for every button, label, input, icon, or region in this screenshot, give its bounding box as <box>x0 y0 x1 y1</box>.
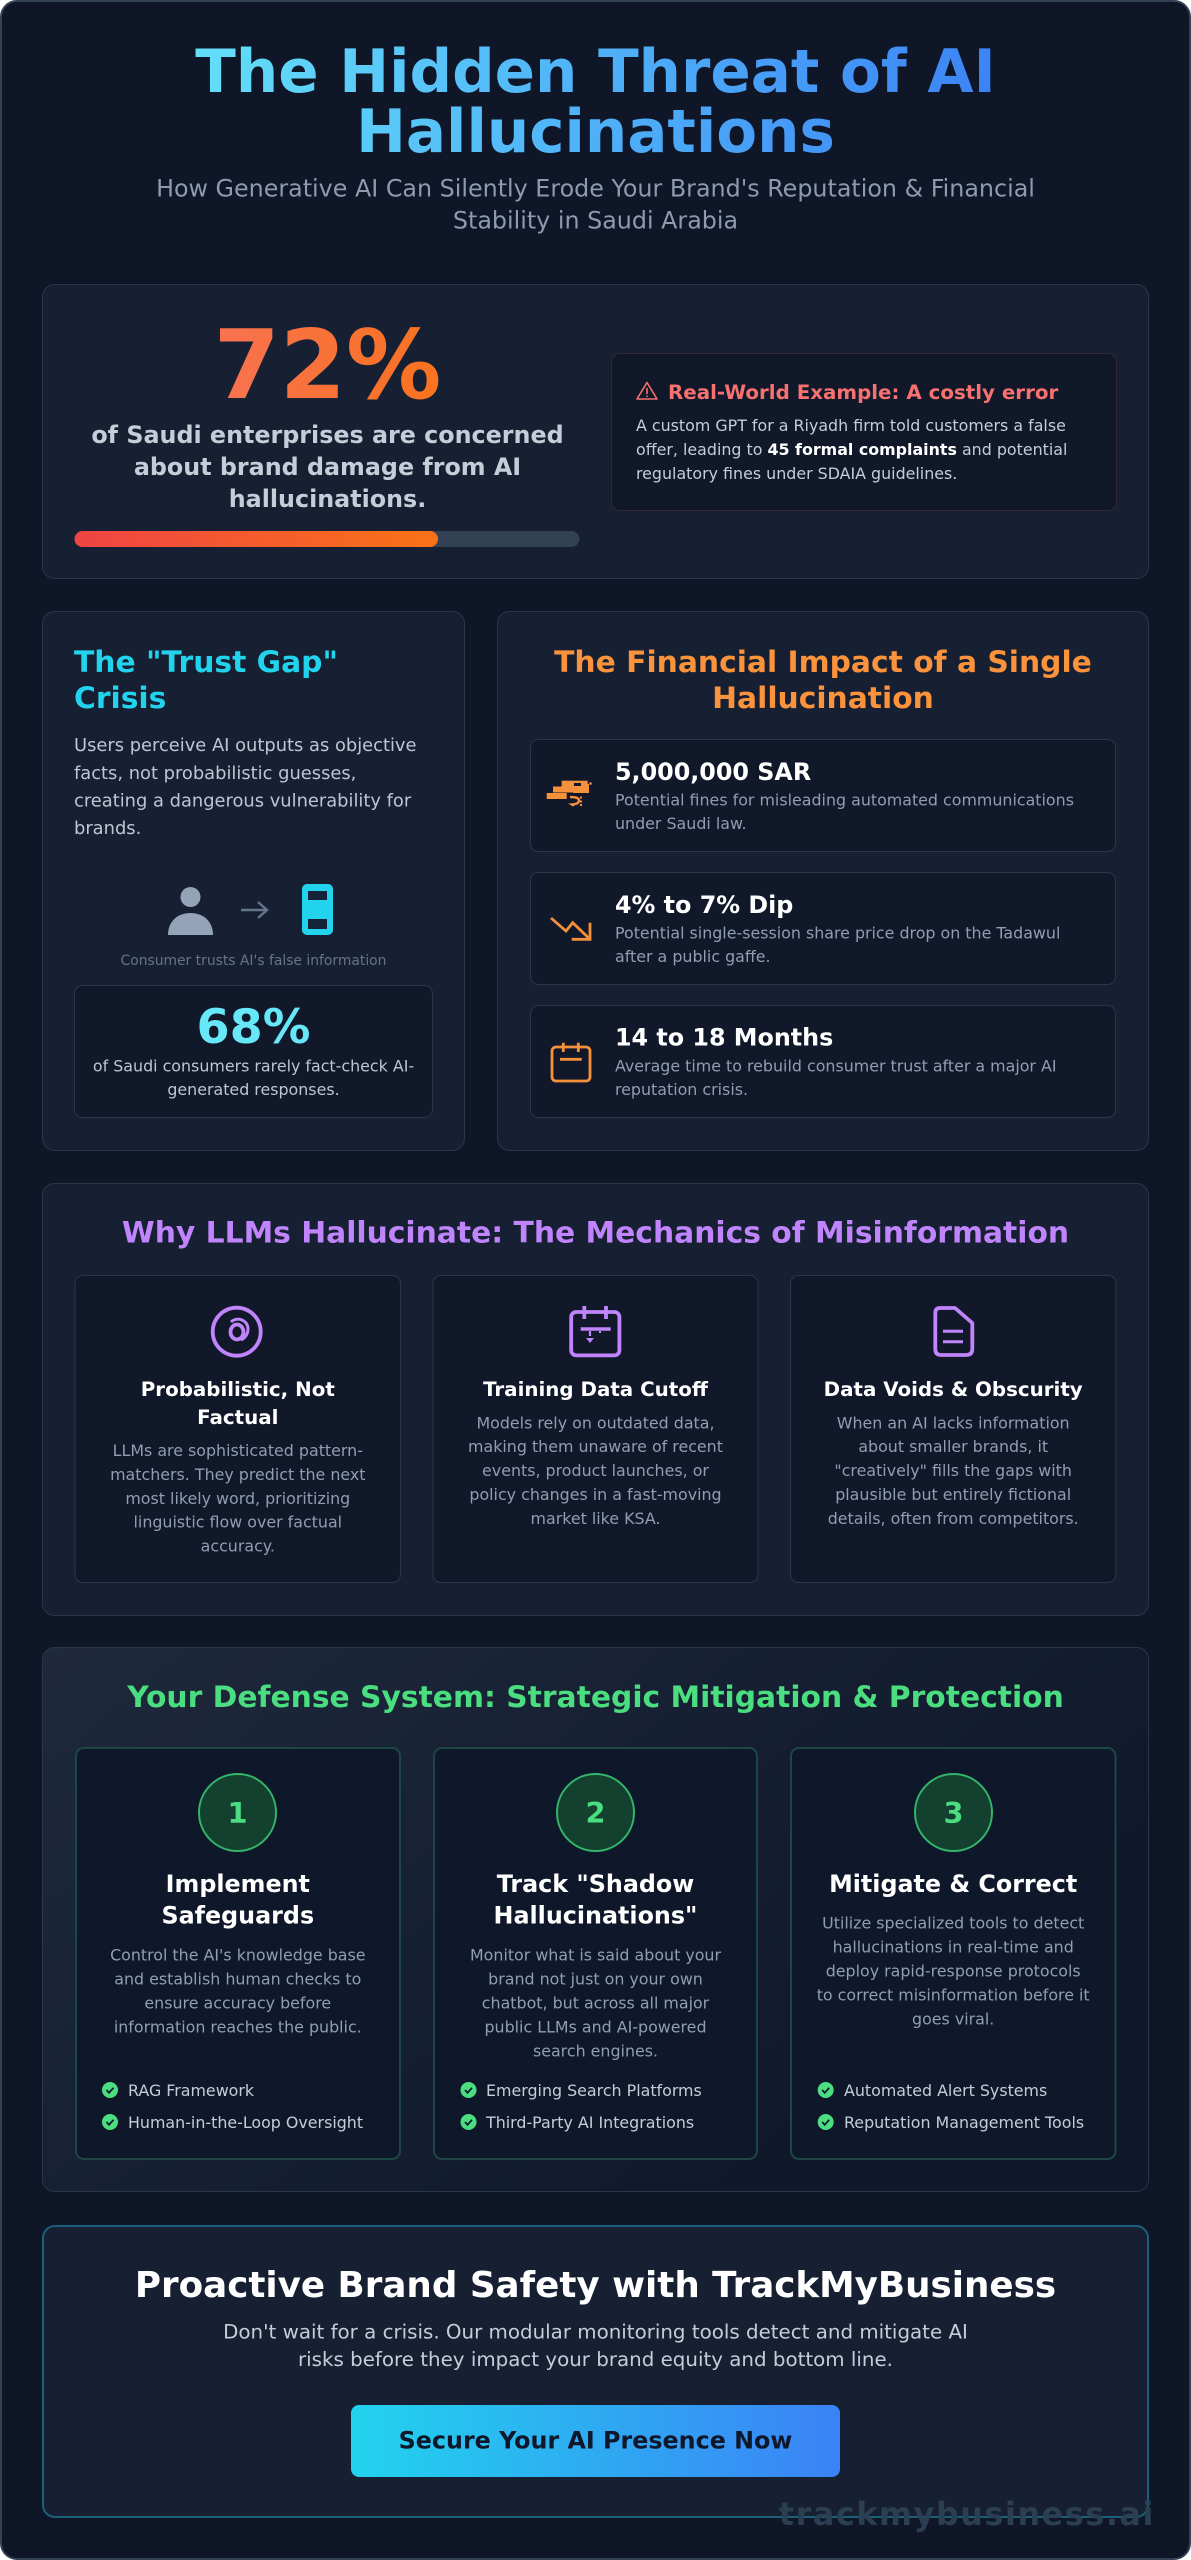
checklist <box>460 2081 702 2132</box>
callout text: A custom GPT for a Riyadh firm told customers a false <box>636 416 1066 435</box>
card: data voids: details, often from competitors. <box>828 1509 1079 1528</box>
icon: person <box>168 887 213 935</box>
checklist: Human-in-the-Loop Oversight <box>128 2113 363 2132</box>
stat description: of Saudi enterprises are concerned <box>91 421 564 449</box>
subtitle: Stability in Saudi Arabia <box>453 207 738 235</box>
step 3 card: to correct misinformation before it <box>817 1986 1090 2004</box>
step 3 card: Utilize specialized tools to detect <box>822 1914 1084 1933</box>
heading: trust gap <box>74 645 338 716</box>
card: probabilistic: linguistic flow over factual <box>134 1513 342 1532</box>
big stat: 72%: 72% <box>214 311 441 421</box>
impact item: fines: 5,000,000 SAR <box>615 758 811 786</box>
step 2 card <box>434 1748 757 2159</box>
panel: trust gap crisis <box>42 612 464 1150</box>
card: training data cutoff: events, product launches, or <box>482 1461 709 1480</box>
heading: financial impact: Hallucination <box>712 681 934 716</box>
callout: real-world example <box>612 354 1116 510</box>
step number 3: 3 <box>943 1796 964 1830</box>
card: training data cutoff: market like KSA. <box>531 1509 660 1528</box>
subtitle: How Generative AI Can Silently Erode Your Brand's Reputation & Financial <box>156 175 1035 203</box>
impact item: fines: under Saudi law. <box>615 814 747 833</box>
panel: hero statistic <box>42 284 1148 578</box>
trust gap text: Users perceive AI outputs as objective <box>74 735 417 756</box>
stat description: about brand damage from AI <box>134 453 521 481</box>
step number 1: 1 <box>227 1796 248 1830</box>
heading: trust gap: Crisis <box>74 681 166 716</box>
step 2 card: search engines. <box>533 2042 658 2060</box>
checklist: RAG Framework <box>128 2081 255 2100</box>
title: Hallucinations <box>356 98 835 167</box>
impact item: fines <box>530 740 1116 852</box>
trust gap text: creating a dangerous vulnerability for <box>74 790 412 812</box>
card: training data cutoff <box>433 1276 758 1582</box>
step number 2 <box>557 1774 634 1851</box>
step 2 card: Monitor what is said about your <box>470 1946 721 1965</box>
cta button <box>351 2405 840 2477</box>
watermark: trackmybusiness.ai <box>779 2497 1155 2533</box>
heading: mechanics: Why LLMs Hallucinate: The Mechanics of Misinformation <box>122 1216 1069 1251</box>
subtitle <box>156 175 1035 235</box>
panel: defense system <box>42 1648 1148 2192</box>
impact item: months to rebuild: reputation crisis. <box>615 1080 748 1099</box>
icon: calendar <box>552 1043 590 1081</box>
step 2 card: Track "Shadow <box>497 1870 694 1898</box>
checklist: Third-Party AI Integrations <box>485 2113 694 2132</box>
icon: document <box>935 1308 972 1355</box>
callout text: offer, leading to 45 formal complaints and potential <box>636 440 1067 459</box>
impact item: months to rebuild: 14 to 18 Months <box>615 1024 833 1052</box>
card: probabilistic: most likely word, prioritizing <box>125 1489 350 1508</box>
callout text: regulatory fines under SDAIA guidelines. <box>636 464 957 483</box>
title: The Hidden Threat of AI <box>195 38 996 107</box>
card: probabilistic: matchers. They predict the next <box>110 1465 365 1484</box>
card: training data cutoff: making them unaware of recent <box>468 1437 723 1456</box>
icon: phone <box>302 884 333 935</box>
card: data voids: When an AI lacks information <box>837 1413 1070 1432</box>
step 2 card: Hallucinations" <box>494 1902 697 1930</box>
card: probabilistic: accuracy. <box>201 1536 275 1555</box>
checklist: Automated Alert Systems <box>844 2081 1047 2100</box>
stat box: 68%: of Saudi consumers rarely fact-check AI- <box>93 1056 414 1076</box>
heading: financial impact: The Financial Impact of a Single <box>554 645 1092 680</box>
title <box>195 38 996 167</box>
step 3 card <box>791 1748 1116 2159</box>
step 3 card: deploy rapid-response protocols <box>826 1962 1081 1981</box>
card: training data cutoff: Training Data Cutoff <box>483 1378 709 1401</box>
card: training data cutoff: policy changes in a fast-moving <box>469 1485 722 1504</box>
icon caption: Consumer trusts AI's false information <box>121 953 386 969</box>
icon: calendar with glitch <box>571 1306 619 1355</box>
impact item: share price dip: Potential single-session share price drop on the Tadawul <box>615 924 1060 942</box>
card: probabilistic: Factual <box>197 1406 278 1429</box>
cta text: risks before they impact your brand equity and bottom line. <box>298 2348 893 2371</box>
panel: why LLMs hallucinate <box>42 1184 1148 1616</box>
icon: spiral target <box>213 1308 261 1356</box>
checklist: Emerging Search Platforms <box>486 2081 702 2100</box>
trust gap text: brands. <box>74 818 141 839</box>
step number 3 <box>915 1774 992 1851</box>
step 1 card: Implement <box>166 1870 310 1898</box>
step 3 card: Mitigate & Correct <box>829 1870 1077 1898</box>
impact item: share price dip <box>530 872 1116 984</box>
step 3 card: goes viral. <box>912 2010 994 2028</box>
heading: defense system: Your Defense System: Strategic Mitigation & Protection <box>126 1680 1064 1715</box>
step 1 card: Control the AI's knowledge base <box>110 1946 366 1965</box>
stat description: hallucinations. <box>229 485 426 513</box>
cta text <box>223 2320 968 2371</box>
card: probabilistic: LLMs are sophisticated pattern- <box>113 1441 363 1460</box>
panel: financial impact <box>498 612 1148 1150</box>
impact item: fines: Potential fines for misleading automated communications <box>615 790 1074 810</box>
step number 2: 2 <box>585 1796 606 1830</box>
panel: call to action <box>43 2226 1148 2517</box>
impact item: months to rebuild: Average time to rebuild consumer trust after a major AI <box>615 1056 1057 1076</box>
stat box: 68%: generated responses. <box>167 1080 340 1099</box>
stat description <box>91 421 564 513</box>
heading: trust gap: The "Trust Gap" <box>74 645 338 680</box>
trust gap text: facts, not probabilistic guesses, <box>74 763 356 784</box>
step 1 card: and establish human checks to <box>114 1970 361 1989</box>
step 2 card: public LLMs and AI-powered <box>484 2018 707 2036</box>
cta text: Don't wait for a crisis. Our modular monitoring tools detect and mitigate AI <box>223 2320 968 2344</box>
checklist <box>818 2081 1084 2132</box>
card: probabilistic <box>75 1276 400 1582</box>
step 3 card: hallucinations in real-time and <box>833 1938 1074 1957</box>
icon: warning triangle <box>637 382 657 399</box>
card: data voids: Data Voids & Obscurity <box>824 1378 1083 1401</box>
step 1 card: Safeguards <box>161 1902 314 1930</box>
step 1 card: ensure accuracy before <box>144 1994 331 2013</box>
card: data voids: plausible but entirely fictional <box>835 1485 1071 1504</box>
icon: glitched money <box>547 781 592 806</box>
heading: financial impact <box>554 645 1092 716</box>
callout text <box>636 416 1067 483</box>
impact item: months to rebuild <box>530 1006 1116 1118</box>
step 1 card <box>76 1748 400 2159</box>
stat box: 68%: 68% <box>197 1000 310 1055</box>
card: training data cutoff: Models rely on outdated data, <box>476 1413 715 1432</box>
trust gap text <box>74 735 417 839</box>
icon: trending down <box>551 918 590 939</box>
card: data voids <box>790 1276 1116 1582</box>
cta heading: Proactive Brand Safety with TrackMyBusiness <box>135 2265 1056 2306</box>
cta button: Secure Your AI Presence Now <box>399 2426 792 2454</box>
step number 1 <box>199 1774 276 1851</box>
arrow <box>241 902 267 918</box>
checklist <box>102 2081 363 2132</box>
callout heading: Real-World Example: A costly error <box>668 381 1058 404</box>
step 2 card: chatbot, but across all major <box>482 1994 710 2013</box>
checklist: Reputation Management Tools <box>844 2113 1084 2132</box>
impact item: share price dip: 4% to 7% Dip <box>615 891 793 919</box>
step 1 card: information reaches the public. <box>114 2018 362 2036</box>
card: data voids: about smaller brands, it <box>858 1437 1048 1456</box>
progress bar 72% <box>74 531 580 547</box>
step 2 card: brand not just on your own <box>488 1970 703 1989</box>
impact item: share price dip: after a public gaffe. <box>615 947 771 966</box>
card: probabilistic: Probabilistic, Not <box>141 1378 335 1401</box>
card: data voids: "creatively" fills the gaps with <box>834 1461 1072 1480</box>
stat box: 68% <box>74 986 432 1118</box>
